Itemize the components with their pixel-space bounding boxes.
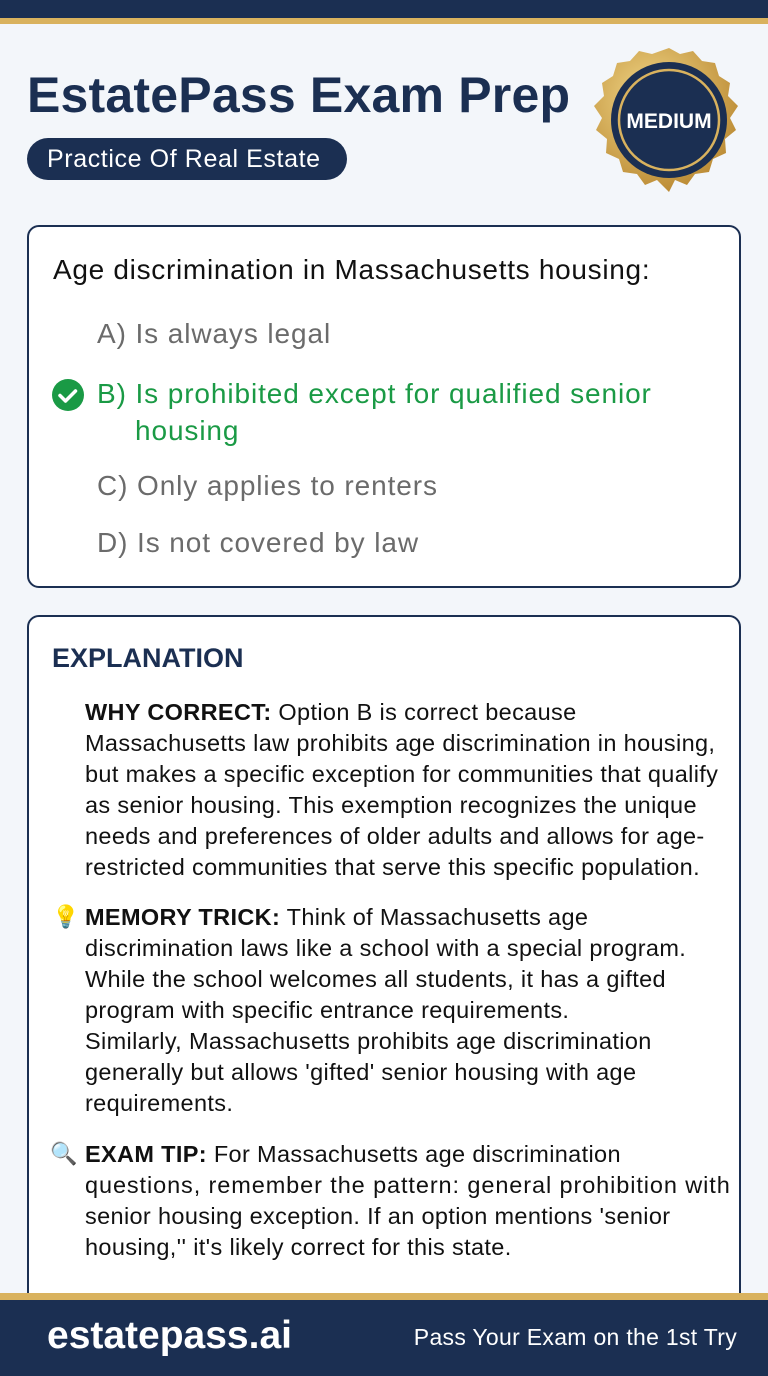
memory trick: generally but allows 'gifted' senior housing with age [85,1059,636,1085]
question text: Age discrimination in Massachusetts housing: [53,254,650,285]
exam tip: senior housing exception. If an option mentions 'senior [85,1203,670,1229]
exam tip: questions, remember the pattern: general prohibition with [85,1172,731,1198]
option C: C) Only applies to renters [97,470,438,501]
memory trick: program with specific entrance requirements. [85,997,569,1023]
option A: A) Is always legal [97,318,331,349]
why correct: as senior housing. This exemption recognizes the unique [85,792,697,818]
panel: explanation [27,615,741,1315]
why correct: Massachusetts law prohibits age discrimination in housing, [85,730,715,756]
footer tagline: Pass Your Exam on the 1st Try [414,1324,737,1350]
why correct: restricted communities that serve this specific population. [85,854,700,880]
top bar [0,0,768,24]
why correct: needs and preferences of older adults and allows for age- [85,823,705,849]
memory trick: requirements. [85,1090,233,1116]
exam tip: EXAM TIP: For Massachusetts age discrimination [85,1141,621,1167]
exam tip: housing,'' it's likely correct for this state. [85,1234,512,1260]
memory trick: Similarly, Massachusetts prohibits age discrimination [85,1028,652,1054]
category pill: Practice Of Real Estate [47,145,321,173]
memory trick: While the school welcomes all students, it has a gifted [85,966,666,992]
footer brand: estatepass.ai [47,1314,292,1357]
badge: medium [594,48,738,192]
memory trick: discrimination laws like a school with a special program. [85,935,686,961]
why correct [85,699,718,880]
explanation heading: EXPLANATION [52,643,244,673]
badge: medium: MEDIUM [626,110,712,133]
icon: check [52,379,84,411]
footer [0,1293,768,1376]
option B correct [97,378,652,446]
panel: question [27,225,741,588]
why correct: but makes a specific exception for communities that qualify [85,761,718,787]
option B correct: housing [135,415,239,446]
memory trick [85,904,686,1116]
icon: magnifier: 🔍 [50,1141,77,1166]
option B correct: B) Is prohibited except for qualified senior [97,378,652,409]
icon: light bulb: 💡 [52,904,79,929]
title: EstatePass Exam Prep [27,67,570,123]
exam tip [85,1141,731,1260]
category pill [27,138,347,180]
why correct: WHY CORRECT: Option B is correct because [85,699,577,725]
memory trick: MEMORY TRICK: Think of Massachusetts age [85,904,588,930]
option D: D) Is not covered by law [97,527,419,558]
